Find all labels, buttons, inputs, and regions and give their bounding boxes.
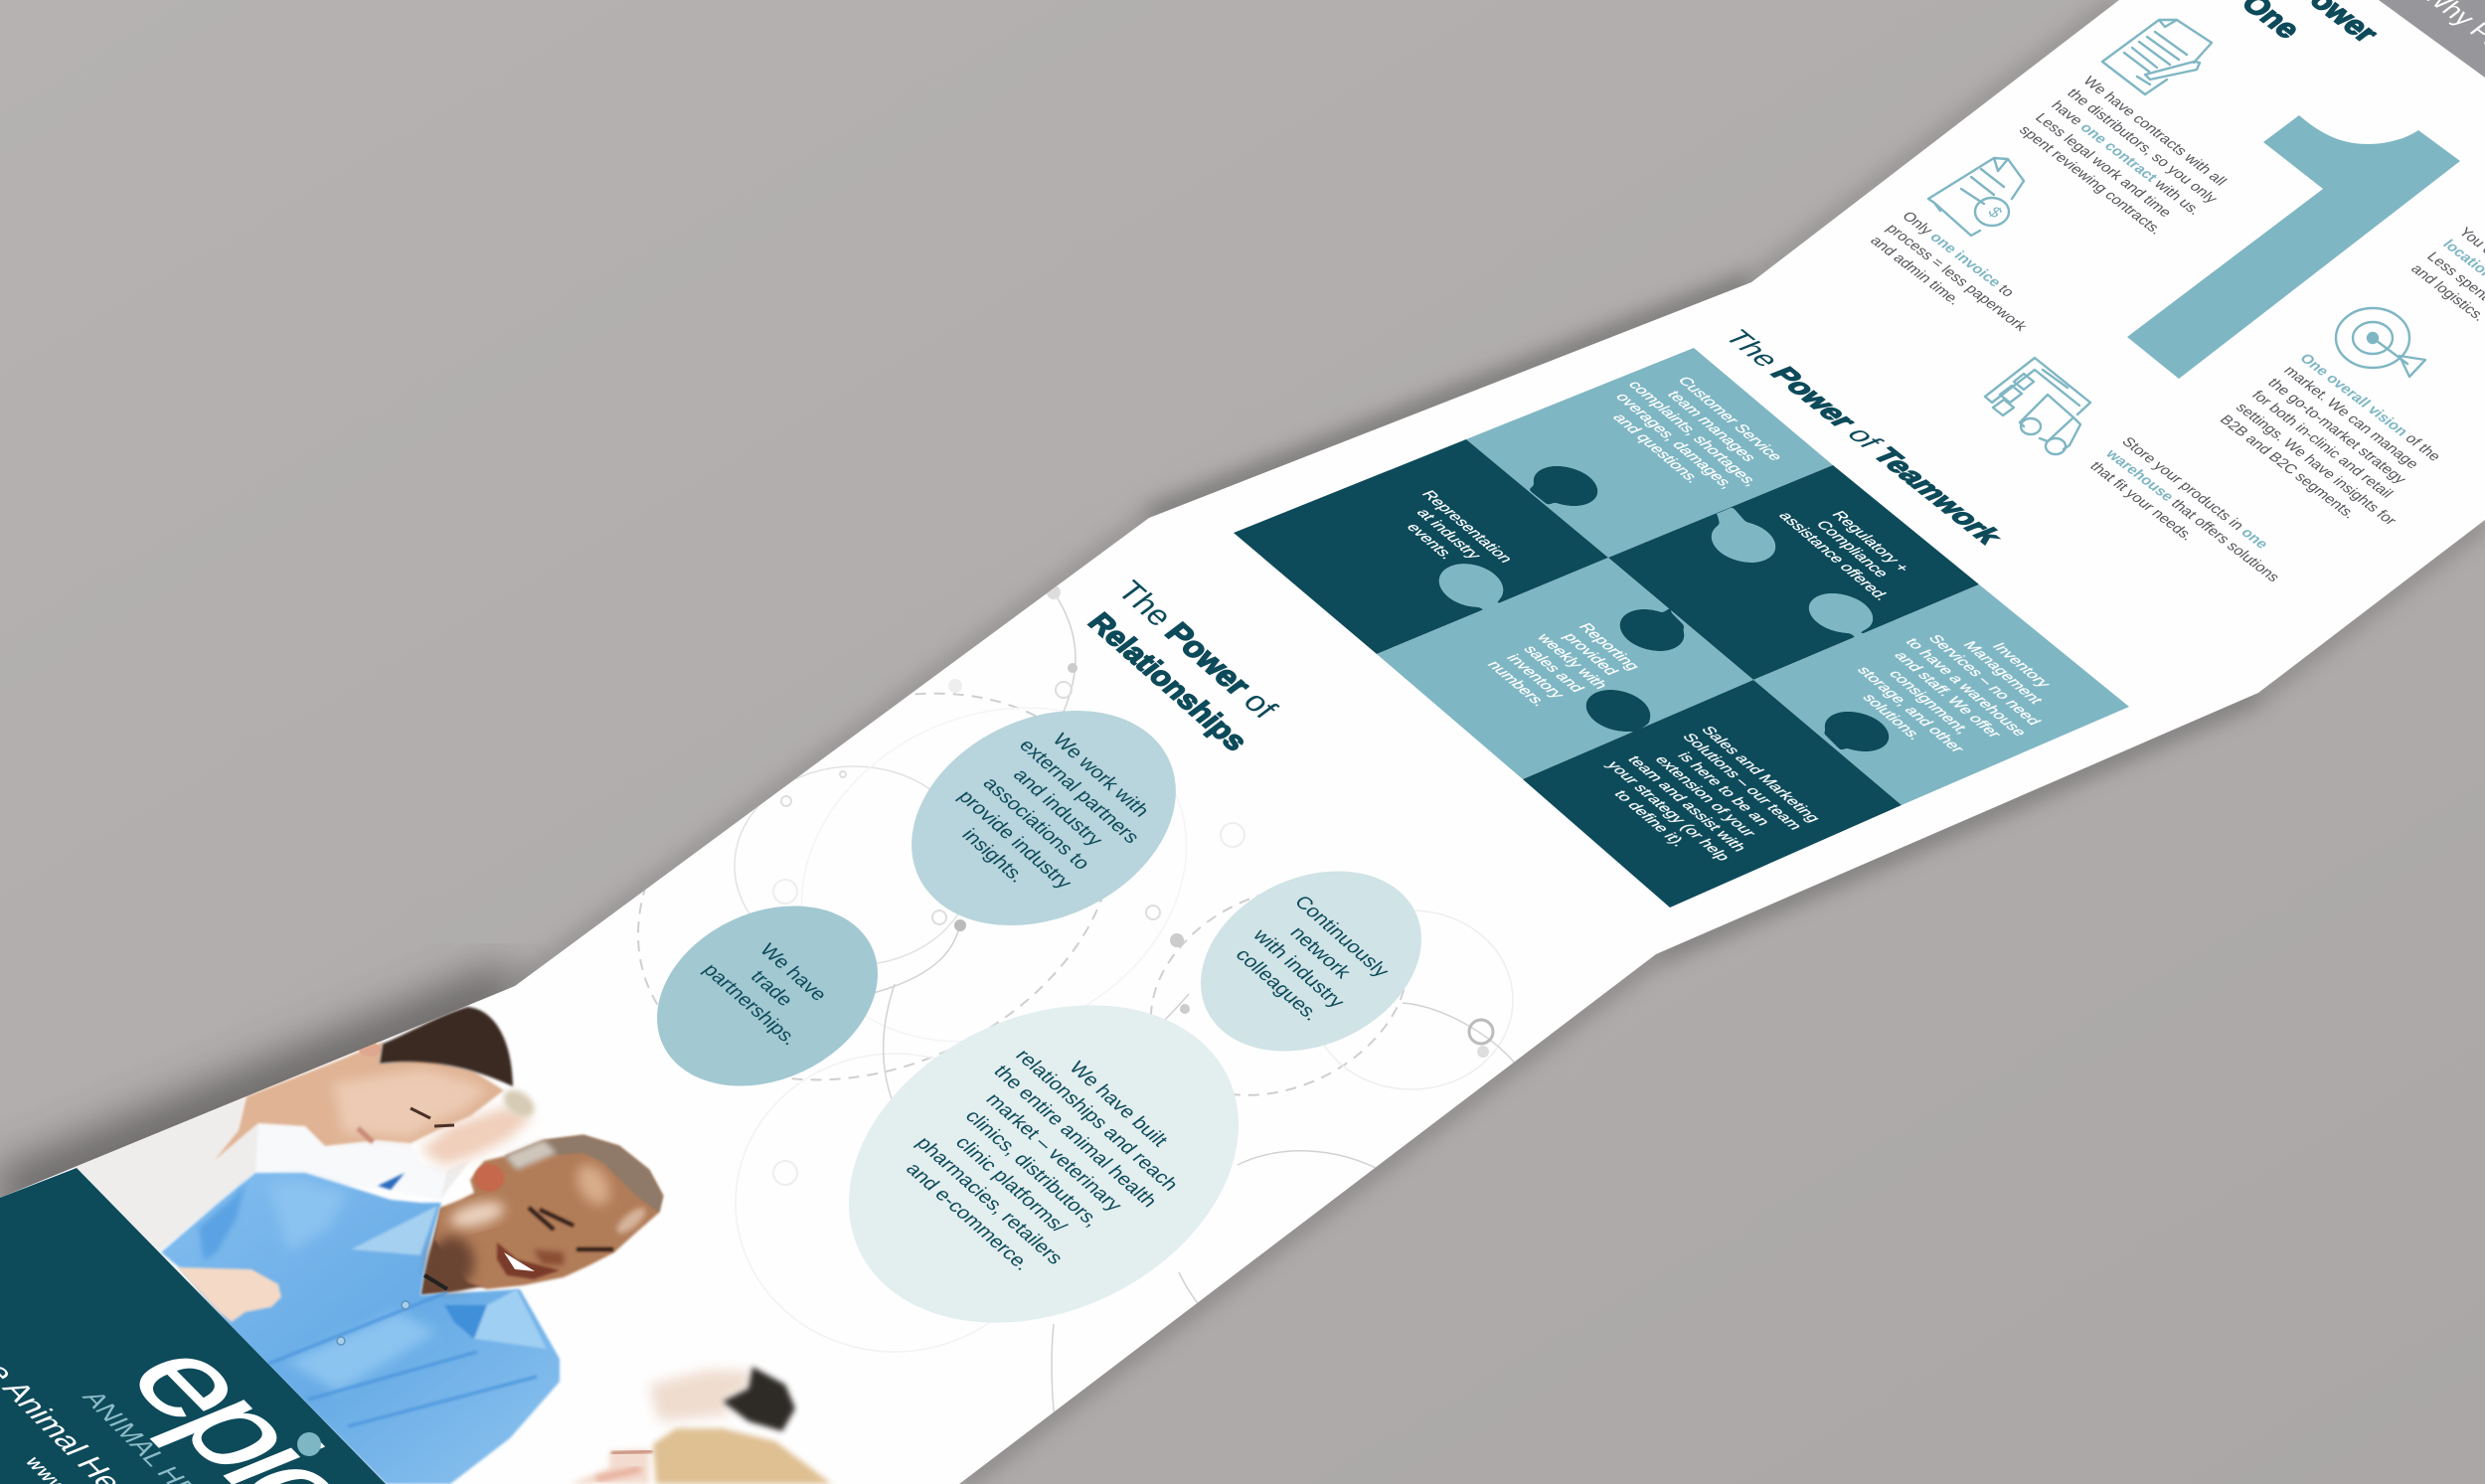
photo: woman hair: [380, 1007, 513, 1086]
puzzle text: sales and marketing: Solutions – our team: [1678, 732, 1805, 832]
text: contract: We have contracts with all: [2079, 74, 2231, 189]
photo: blurred man: [649, 1367, 795, 1431]
photo: blonde woman: [570, 1428, 832, 1484]
puzzle cells: [1234, 348, 2129, 907]
dark puzzle tabs: [1521, 460, 1894, 757]
icon: invoice: [1928, 158, 2024, 236]
circle: trade partnerships: trade: [746, 967, 797, 1010]
text: contract: have one contract with us.: [2048, 98, 2204, 218]
circle: external partners: insights.: [957, 825, 1030, 887]
puzzle text: inventory: to have a warehouse: [1902, 637, 2030, 739]
text: warehouse: Store your products in one: [2118, 434, 2271, 552]
puzzle text: inventory: Management: [1959, 639, 2046, 706]
circle: built relationships: market – veterinary: [981, 1089, 1126, 1216]
circle: network: [1171, 837, 1451, 1085]
puzzle text: inventory: storage, and other: [1853, 665, 1968, 755]
puzzle text: reporting: inventory: [1502, 652, 1568, 701]
puzzle text: reporting: numbers.: [1483, 659, 1550, 709]
puzzle text: sales and marketing: is here to be an: [1674, 750, 1773, 828]
circle: built relationships: the entire animal health: [989, 1062, 1161, 1211]
text: contract: Less legal work and time: [2032, 110, 2175, 220]
text: vision: B2B and B2C segments.: [2216, 412, 2359, 522]
text: warehouse: warehouse that offers solutions: [2102, 446, 2283, 584]
text: vision: settings. We have insights for: [2232, 401, 2400, 528]
puzzle text: customer service: complaints, shortages,: [1624, 380, 1761, 488]
network lines: [575, 585, 1517, 1484]
circle: trade partnerships: partnerships.: [698, 960, 802, 1050]
photo: man neck: [419, 1207, 485, 1296]
circle: built relationships: and e-commerce.: [901, 1159, 1035, 1274]
puzzle text: reporting: weekly with: [1532, 631, 1610, 691]
puzzle text: customer service: and questions.: [1608, 412, 1704, 485]
circle: external partners: provide industry: [953, 787, 1077, 893]
circle: network: with industry: [1247, 925, 1349, 1012]
text: vision: the go-to-market strategy: [2264, 376, 2410, 487]
puzzle text: reporting: Reporting: [1574, 621, 1643, 672]
puzzle text: inventory: Inventory: [1988, 641, 2054, 690]
puzzle text: customer service: overages, damages,: [1611, 392, 1738, 491]
circle: built relationships: pharmacies, retailers: [911, 1133, 1068, 1268]
panel: the power of relationships: [575, 575, 1517, 1484]
circle: built relationships: relationships and reach: [1011, 1046, 1183, 1195]
text: invoice: and admin time.: [1867, 234, 1964, 308]
puzzle text: representation: Representation: [1417, 489, 1516, 565]
puzzle text: sales and marketing: your strategy (or help: [1602, 759, 1734, 863]
text: vision: for both in-clinic and retail: [2248, 388, 2397, 501]
puzzle text: regulatory: Regulatory +: [1828, 509, 1912, 575]
circle: external partners: external partners: [1015, 736, 1144, 847]
circle: network: Continuously: [1289, 893, 1394, 981]
circle: external partners: associations to: [978, 773, 1094, 874]
circle: built relationships: [797, 944, 1290, 1384]
circle: trade partnerships: We have: [755, 940, 831, 1005]
big numeral one: [2127, 115, 2460, 379]
puzzle text: sales and marketing: extension of your: [1651, 754, 1759, 839]
puzzle text: sales and marketing: to define it).: [1609, 789, 1689, 849]
photo: white shirt of woman: [73, 1096, 470, 1252]
light puzzle tabs: [1434, 497, 1879, 641]
text: vision: One overall vision of the: [2296, 351, 2444, 464]
puzzle text: regulatory: Compliance: [1812, 519, 1892, 579]
icon: contract: [2102, 20, 2212, 94]
circle: built relationships: clinic platforms/: [950, 1133, 1072, 1237]
puzzle text: representation: at industry: [1412, 507, 1484, 561]
grey corner tab: [2379, 0, 2485, 86]
circle: network: colleagues.: [1231, 945, 1324, 1025]
puzzle text: reporting: provided: [1559, 631, 1621, 677]
circle: external partners: We work with: [1048, 730, 1153, 821]
puzzle text: customer service: team manages: [1663, 390, 1759, 463]
circle: external partners: and industry: [1008, 765, 1107, 850]
puzzle text: sales and marketing: team and assist with: [1623, 754, 1749, 854]
photo: shirt buttons: [337, 1301, 410, 1345]
logo i dot: [297, 1432, 321, 1456]
photo: hand: [177, 1267, 281, 1322]
text: contract: the distributors, so you only: [2064, 85, 2222, 207]
panel: the power of teamwork: [1234, 327, 2129, 907]
icon: invoice dollar: $: [1984, 204, 2007, 221]
puzzle text: inventory: Services – no need: [1924, 633, 2044, 728]
text: warehouse: that fit your needs.: [2086, 459, 2197, 544]
circle: network: network: [1285, 923, 1356, 983]
heading: relationships: The Power of: [1110, 575, 1285, 725]
photo: man head: [424, 1135, 663, 1289]
circle: external partners: [877, 670, 1211, 966]
heading: teamwork: The Power of Teamwork: [1717, 327, 2009, 548]
puzzle text: inventory: and staff. We offer: [1890, 650, 2005, 741]
text: vision: market. We can manage: [2280, 363, 2422, 472]
puzzle text: inventory: solutions.: [1858, 693, 1925, 742]
puzzle text: representation: events.: [1403, 522, 1457, 562]
text: invoice: Only one invoice to: [1899, 209, 2018, 300]
panel: cover photo: [73, 1007, 832, 1484]
puzzle text: reporting: sales and: [1520, 644, 1587, 694]
photo: blurred colleague: [378, 1084, 539, 1190]
puzzle text: inventory: consignment,: [1885, 669, 1972, 736]
puzzle text: customer service: Customer Service: [1674, 375, 1786, 463]
panel: teal logo block: [0, 1168, 393, 1484]
photo: woman face: [214, 1042, 504, 1161]
text: contract: spent reviewing contracts.: [2015, 123, 2166, 238]
circle: built relationships: clinics, distributors,: [960, 1106, 1104, 1231]
icon: warehouse truck: [1985, 358, 2090, 454]
puzzle text: regulatory: assistance offered.: [1774, 510, 1893, 602]
circle: trade partnerships: [627, 872, 908, 1120]
circle: built relationships: We have built: [1065, 1058, 1172, 1151]
puzzle text: sales and marketing: Sales and Marketing: [1697, 725, 1823, 824]
icon: target: [2336, 308, 2425, 377]
puzzle: [1234, 348, 2129, 907]
text: invoice: process = less paperwork: [1883, 221, 2031, 334]
heading line 2: Relationships: [1081, 608, 1254, 756]
photo: blue shirt: [161, 1173, 560, 1484]
photo: collars: [351, 1206, 547, 1349]
panel: the power of one: [1867, 0, 2485, 597]
